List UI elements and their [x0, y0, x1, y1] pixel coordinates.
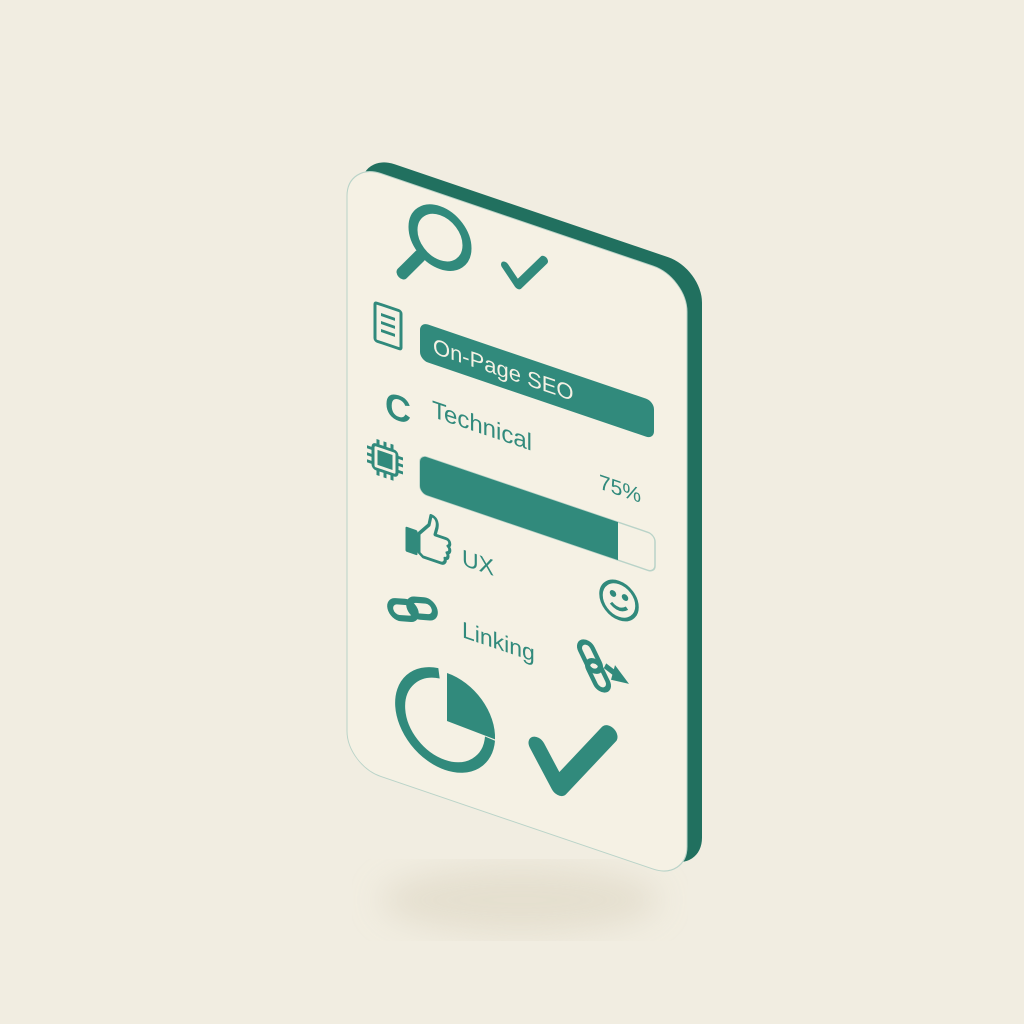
label: 75%: 75% [599, 469, 641, 508]
icon: link with arrow [577, 637, 629, 702]
card face [347, 162, 687, 881]
icon: small check [505, 247, 544, 294]
label: Technical: Technical [432, 396, 532, 457]
icon: thumbs up [407, 507, 450, 566]
bar: On-Page SEO: On-Page SEO [433, 334, 574, 406]
icon: C: C [385, 383, 411, 433]
card thickness [361, 153, 702, 872]
icon: chip [367, 436, 403, 484]
card [347, 148, 702, 886]
icon: magnifier [402, 198, 467, 296]
shadow [380, 866, 660, 934]
label: Linking: Linking [462, 618, 535, 668]
icon: link [388, 586, 437, 633]
icon: big check [537, 710, 609, 804]
chart: pie [400, 657, 495, 782]
progress bar [420, 455, 655, 573]
bar: On-Page SEO [420, 322, 654, 439]
label: UX: UX [462, 546, 494, 582]
icon: smiley [601, 576, 637, 625]
icon: document [375, 303, 401, 349]
